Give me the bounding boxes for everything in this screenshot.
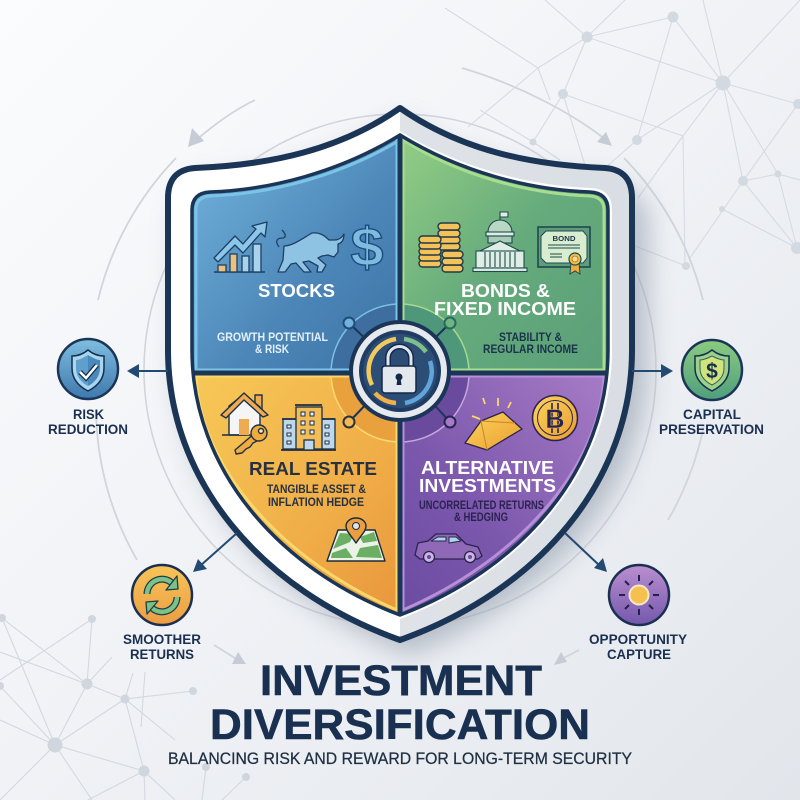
text: stability and regular income: STABILITY & xyxy=(499,332,562,344)
title xyxy=(210,657,590,749)
benefit: smoother returns xyxy=(123,533,237,662)
shield outer rim xyxy=(168,108,632,640)
icon: office building xyxy=(281,405,336,450)
heading: bonds and fixed income xyxy=(434,281,576,319)
text: tangible asset and inflation hedge xyxy=(267,484,366,509)
icon: dollar sign: $ xyxy=(350,216,384,278)
label: risk reduction: REDUCTION xyxy=(48,422,128,437)
heading: alternative investments xyxy=(419,458,556,496)
text: growth potential and risk xyxy=(217,332,328,356)
label: opportunity capture: OPPORTUNITY xyxy=(589,632,687,647)
icon: house and key xyxy=(221,393,268,454)
shield xyxy=(168,108,632,640)
arrow: to opportunity capture xyxy=(565,533,607,572)
network pattern bottom left xyxy=(0,614,250,800)
label: capital preservation: PRESERVATION xyxy=(659,422,764,437)
panel: real estate quadrant xyxy=(190,373,400,618)
lock status arcs xyxy=(369,339,432,403)
text: tangible asset and inflation hedge: INFLATION HEDGE xyxy=(268,497,364,509)
shield inner white edge xyxy=(188,131,612,619)
network pattern top right xyxy=(445,0,800,270)
icon: shield check xyxy=(58,339,118,399)
connector nodes xyxy=(344,318,456,428)
icon: shield dollar: $ xyxy=(706,360,718,383)
stocks content xyxy=(214,216,384,356)
central lock badge xyxy=(349,320,451,422)
text: uncorrelated returns and hedging: & HEDGING xyxy=(454,512,508,524)
icon: padlock xyxy=(382,346,416,393)
panel: bonds quadrant xyxy=(404,142,606,368)
text: stability and regular income xyxy=(483,332,578,356)
text: uncorrelated returns and hedging: UNCORRELATED RETURNS xyxy=(419,500,544,512)
text: growth potential and risk: & RISK xyxy=(255,344,290,356)
icon: classic car xyxy=(415,534,482,562)
benefit: opportunity capture xyxy=(565,533,687,662)
label: opportunity capture: CAPTURE xyxy=(607,647,671,662)
icon: coin stacks xyxy=(419,223,463,272)
quadrant accent arcs xyxy=(331,304,469,442)
icon: gold bar xyxy=(465,398,522,450)
heading: stocks: STOCKS xyxy=(258,281,335,301)
benefit: capital preservation xyxy=(632,340,764,437)
heading: alternative investments: INVESTMENTS xyxy=(419,476,556,496)
quadrant dividers xyxy=(190,130,610,620)
icon: cycle arrows xyxy=(132,565,192,625)
text: growth potential and risk: GROWTH POTENTIAL xyxy=(217,332,328,344)
icon: bull xyxy=(277,230,344,272)
label: smoother returns: RETURNS xyxy=(130,647,194,662)
icon: bond certificate xyxy=(538,227,590,274)
grey orbit arcs and arrows xyxy=(96,68,704,665)
shield shadow xyxy=(178,120,648,655)
label: risk reduction: RISK xyxy=(73,407,104,422)
subtitle: BALANCING RISK AND REWARD FOR LONG-TERM SECURITY xyxy=(168,750,632,768)
icon: map pin xyxy=(327,518,385,561)
text: tangible asset and inflation hedge: TANGIBLE ASSET & xyxy=(267,484,366,496)
arrow: to capital preservation xyxy=(632,364,673,378)
icon: bond certificate: BOND xyxy=(552,234,576,243)
heading: real estate: REAL ESTATE xyxy=(249,459,377,479)
icon: sun xyxy=(609,565,669,625)
icon: capitol building xyxy=(473,212,527,272)
text: uncorrelated returns and hedging xyxy=(419,500,544,524)
arrow: to risk reduction xyxy=(127,364,168,378)
panel: stocks quadrant xyxy=(190,130,610,620)
title: DIVERSIFICATION xyxy=(210,701,590,749)
label: smoother returns: SMOOTHER xyxy=(123,632,201,647)
heading: bonds and fixed income: FIXED INCOME xyxy=(434,299,576,319)
alternative investments content xyxy=(415,396,578,562)
label: risk reduction xyxy=(48,407,128,437)
label: opportunity capture xyxy=(589,632,687,662)
label: capital preservation: CAPITAL xyxy=(683,407,741,422)
icon: bitcoin coin: B xyxy=(545,404,565,434)
text: stability and regular income: REGULAR INCOME xyxy=(483,344,578,356)
icon: growth chart xyxy=(214,222,267,272)
label: capital preservation xyxy=(659,407,764,437)
title: INVESTMENT xyxy=(260,657,542,705)
panel light inner edges xyxy=(196,140,604,610)
panel: alternative investments quadrant xyxy=(400,373,610,618)
arrow: to smoother returns xyxy=(193,533,237,572)
benefit: risk reduction xyxy=(48,339,168,437)
heading: bonds and fixed income: BONDS & xyxy=(461,281,550,301)
label: smoother returns xyxy=(123,632,201,662)
icon: bitcoin coin xyxy=(532,396,578,440)
real estate content xyxy=(221,393,385,561)
panel outline xyxy=(192,135,608,615)
bonds content xyxy=(419,212,590,356)
heading: alternative investments: ALTERNATIVE xyxy=(421,458,554,478)
